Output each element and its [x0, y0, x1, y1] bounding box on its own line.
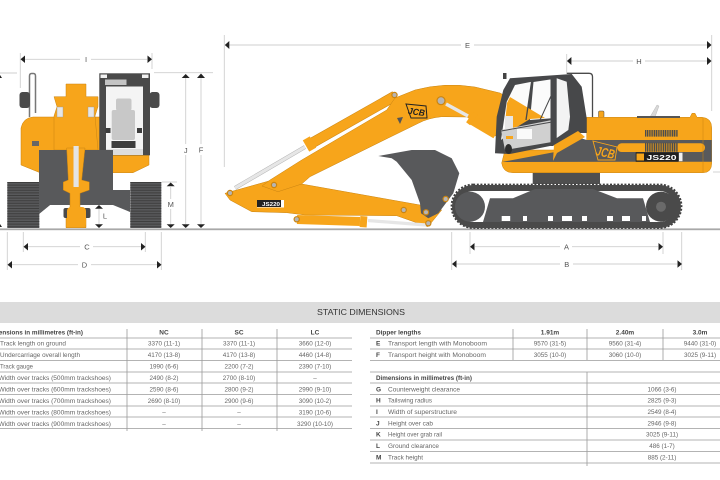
- boom warning mark: [397, 117, 403, 124]
- dimension F: [154, 73, 213, 228]
- hood top strip: [637, 116, 680, 118]
- row: 700mm trackshoes: Width over tracks (700mm trackshoes): [0, 398, 111, 405]
- row: transport length: Transport length with Monoboom: [388, 340, 487, 348]
- row I: I: [376, 409, 378, 416]
- row: 600mm trackshoes: Width over tracks (600mm trackshoes): [0, 386, 111, 394]
- row M: 885 (2-11): [648, 454, 676, 462]
- dimension H: H: [636, 57, 642, 66]
- row G: G: [376, 386, 381, 393]
- row: 500mm trackshoes: 2700 (8-10): [223, 375, 255, 382]
- cylinder rods: [57, 107, 94, 117]
- dipper header: Dipper lengths: [376, 329, 421, 336]
- row: 500mm trackshoes: 2490 (8-2): [149, 375, 179, 382]
- row M: M: [376, 454, 381, 462]
- row K: 3025 (9-11): [646, 432, 678, 438]
- dipper rules: [370, 338, 720, 360]
- boom cylinder: [446, 104, 496, 134]
- dipper rod: [74, 146, 79, 187]
- dimension J: [182, 74, 190, 228]
- dimension E: [224, 35, 712, 167]
- ground line: [0, 228, 720, 230]
- cab frame: [495, 74, 587, 154]
- row J: J: [376, 420, 380, 428]
- row K: [376, 432, 678, 438]
- row: 600mm trackshoes: 2800 (9-2): [224, 386, 254, 394]
- row: 800mm trackshoes: –: [237, 410, 241, 416]
- row H: Tailswing radius: [388, 398, 432, 404]
- cab mirror: [503, 73, 506, 79]
- main boom: [262, 85, 543, 192]
- orange stripe: [617, 143, 705, 152]
- superstructure body: [21, 117, 149, 173]
- dimension A: A: [564, 242, 569, 252]
- pivot pins: [227, 92, 448, 226]
- row: 600mm trackshoes: 2590 (8-6): [149, 386, 179, 394]
- dipper model badge: [257, 200, 284, 208]
- dimension E: E: [465, 41, 470, 50]
- row: track gauge: 1990 (6-6): [149, 364, 179, 370]
- table header: LC: [311, 329, 320, 336]
- cab rear window: [557, 78, 570, 138]
- dimension B: [452, 232, 682, 270]
- row: 500mm trackshoes: –: [313, 375, 317, 382]
- row: 900mm trackshoes: –: [237, 421, 241, 428]
- row: transport length: [376, 340, 716, 348]
- row I: [376, 409, 677, 416]
- row: transport length: 9440 (31-0): [684, 340, 716, 348]
- dimension G clipped at right edge: [713, 171, 720, 173]
- table header: SC: [234, 329, 244, 336]
- section band with title: STATIC DIMENSIONS: [317, 307, 405, 317]
- cab door handle oval: [505, 144, 512, 154]
- row: 800mm trackshoes: 3190 (10-6): [299, 410, 331, 416]
- dimension M: [162, 182, 177, 228]
- bucket: [378, 150, 459, 218]
- row L: 486 (1-7): [649, 443, 675, 450]
- row: transport height: 3025 (9-11): [684, 352, 716, 359]
- idler wheel: [455, 192, 485, 222]
- row: transport height: F: [376, 352, 380, 359]
- row: track length on ground: Track length on ground: [0, 340, 67, 348]
- model badge: [636, 152, 682, 162]
- row J: Height over cab: [388, 420, 434, 428]
- row: track gauge: 2390 (7-10): [299, 364, 331, 370]
- row: undercarriage overall length: 4460 (14-8): [299, 352, 331, 359]
- row: transport height: 3060 (10-0): [609, 352, 641, 359]
- row I: Width of superstructure: [388, 409, 458, 416]
- row: transport height: 3055 (10-0): [534, 352, 566, 359]
- table: dipper lengths: [370, 329, 720, 360]
- row I: 2549 (8-4): [647, 409, 677, 416]
- row: track gauge: 2200 (7-2): [224, 364, 254, 370]
- row: 800mm trackshoes: –: [162, 410, 166, 416]
- dimension B: B: [564, 260, 569, 269]
- upper dipper cylinder: [235, 96, 395, 188]
- row: track length on ground: [0, 340, 331, 348]
- rear edge: [702, 118, 704, 172]
- row: 700mm trackshoes: 2690 (8-10): [148, 398, 180, 405]
- table: machine dimensions: [370, 372, 720, 466]
- cab pillars: [501, 79, 552, 146]
- cab orange swoosh: [553, 131, 585, 161]
- row: transport length: 9560 (31-4): [609, 340, 641, 348]
- table rules: [0, 338, 352, 428]
- row J: [376, 420, 677, 428]
- row: undercarriage overall length: [0, 352, 331, 359]
- row L: [376, 443, 675, 450]
- engine hood pipe: [650, 105, 659, 117]
- row L: L: [376, 443, 380, 450]
- row G: [376, 386, 677, 393]
- grab rail: [567, 73, 592, 118]
- row K: K: [376, 432, 381, 438]
- dimension M: M: [168, 200, 174, 209]
- row M: [376, 454, 676, 462]
- row: track length on ground: 3370 (11-1): [223, 340, 255, 348]
- row: 700mm trackshoes: [0, 398, 331, 405]
- body grey band: [502, 137, 712, 162]
- row: 900mm trackshoes: –: [162, 421, 166, 428]
- cab middle window: [530, 79, 552, 120]
- sprocket: [646, 192, 676, 222]
- row: 900mm trackshoes: Width over tracks (900mm trackshoes): [0, 421, 111, 428]
- dipper column dividers: [513, 329, 663, 360]
- side view excavator: [225, 73, 712, 228]
- dimension C: C: [84, 242, 90, 252]
- dozer-style plate: [39, 150, 113, 214]
- dimension J: J: [184, 146, 188, 155]
- row L: Ground clearance: [388, 443, 440, 450]
- dimension F: F: [199, 146, 204, 154]
- upper vent: [645, 130, 678, 137]
- machine header: Dimensions in millimetres (ft-in): [376, 375, 472, 382]
- bucket side: [64, 208, 90, 218]
- dipper header: [376, 329, 708, 336]
- row: track gauge: [0, 364, 331, 370]
- machine column divider: [586, 372, 588, 466]
- grab rail: [30, 74, 36, 117]
- dipper header: 3.0m: [693, 329, 708, 336]
- row: 900mm trackshoes: [0, 421, 333, 428]
- row: transport height: [376, 352, 716, 359]
- dimension K clipped at left edge: [0, 73, 17, 227]
- dimension C: [23, 232, 145, 252]
- dimension I: [20, 53, 152, 88]
- bucket cylinder: [297, 220, 426, 225]
- exhaust cap: [598, 111, 604, 118]
- boom through glass: [505, 97, 545, 130]
- row: undercarriage overall length: 4170 (13-8): [223, 352, 255, 359]
- row: 600mm trackshoes: [0, 386, 331, 394]
- dimension D: [7, 232, 161, 270]
- right mirror: [150, 92, 160, 108]
- row: transport height: Transport height with Monoboom: [388, 352, 486, 359]
- row: 600mm trackshoes: 2990 (9-10): [299, 386, 331, 394]
- track frame: [483, 189, 650, 222]
- row K: Height over grab rail: [388, 432, 442, 438]
- table: undercarriage dimensions: [0, 329, 352, 431]
- row: track length on ground: 3370 (11-1): [148, 340, 180, 348]
- row G: Counterweight clearance: [388, 386, 461, 393]
- roller gaps: [502, 216, 646, 221]
- row H: 2825 (9-3): [647, 398, 677, 404]
- machine rules: [370, 372, 720, 463]
- row: 800mm trackshoes: [0, 410, 331, 416]
- cab front window: [501, 82, 532, 140]
- row: 700mm trackshoes: 2900 (9-6): [224, 398, 254, 405]
- row H: [376, 398, 677, 404]
- dipper model badge: JS220: [262, 202, 280, 208]
- row M: Track height: [388, 454, 423, 462]
- JCB body logo: JCB: [595, 143, 616, 162]
- dipper header: 1.91m: [541, 329, 559, 336]
- upper body: [502, 113, 712, 173]
- row: transport length: 9570 (31-5): [534, 340, 566, 348]
- dimension A: [470, 232, 663, 254]
- section band with title: [0, 302, 720, 323]
- front view excavator: [7, 73, 161, 228]
- dimension H: [567, 54, 712, 73]
- row: transport length: E: [376, 340, 381, 348]
- dipper arm: [63, 148, 89, 228]
- battery panel: [32, 141, 39, 146]
- dimension D: D: [82, 260, 88, 270]
- row: track gauge: Track gauge: [0, 364, 33, 370]
- row: 500mm trackshoes: [0, 375, 317, 382]
- row: undercarriage overall length: Undercarriage overall length: [0, 352, 80, 359]
- dipper arm: [225, 181, 442, 227]
- lower vent: [645, 143, 678, 152]
- cab: [99, 73, 150, 155]
- row: 800mm trackshoes: Width over tracks (800mm trackshoes): [0, 410, 111, 416]
- row: track length on ground: 3660 (12-0): [299, 340, 331, 348]
- row H: H: [376, 398, 381, 404]
- crawler track: [452, 184, 682, 228]
- model badge: JS220: [646, 155, 677, 162]
- row: 700mm trackshoes: 3090 (10-2): [299, 398, 331, 405]
- undercarriage centre: [39, 190, 130, 214]
- bucket centre: [67, 207, 86, 228]
- boom shoulders: [54, 84, 98, 150]
- dimension L: [95, 205, 107, 228]
- dimension I: I: [85, 55, 87, 64]
- row G: 1066 (3-6): [647, 386, 677, 393]
- row: undercarriage overall length: 4170 (13-8): [148, 352, 180, 359]
- JCB boom logo: JCB: [407, 106, 426, 118]
- dimension L: L: [103, 212, 107, 220]
- row: 500mm trackshoes: Width over tracks (500mm trackshoes): [0, 375, 111, 382]
- table header: [0, 329, 320, 336]
- table column dividers: [127, 329, 277, 431]
- right track: [130, 182, 161, 228]
- slew ring: [533, 172, 600, 184]
- dipper header: 2.40m: [616, 329, 634, 336]
- seat and cab interior: [501, 116, 552, 150]
- left track: [7, 182, 39, 228]
- left mirror: [20, 92, 30, 108]
- row J: 2946 (9-8): [647, 420, 677, 428]
- row: 900mm trackshoes: 3290 (10-10): [297, 421, 333, 428]
- JCB body logo: [593, 141, 617, 162]
- table header: NC: [159, 329, 169, 336]
